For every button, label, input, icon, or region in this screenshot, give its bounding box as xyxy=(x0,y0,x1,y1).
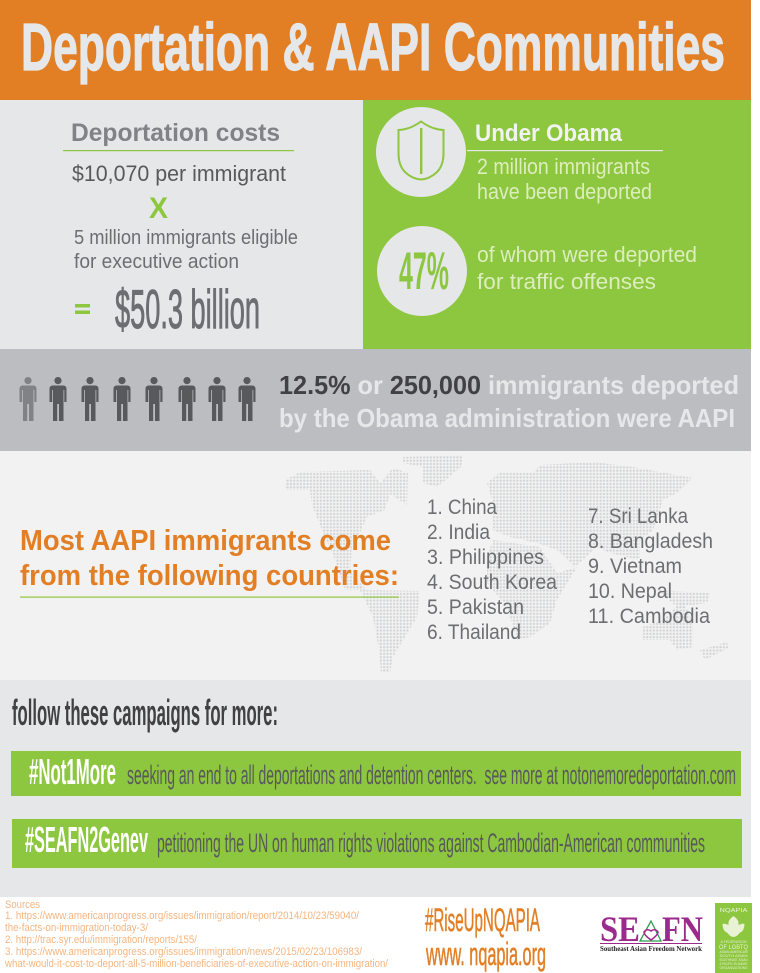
country list column 2: 10. Nepal xyxy=(588,580,672,603)
multiply sign: X xyxy=(149,192,168,225)
sources: 3. https://www.americanprogress.org/issues/immigration/news/2015/02/23/106983/ xyxy=(5,946,363,958)
sources: what-would-it-cost-to-deport-all-5-million-beneficiaries-of-executive-action-on-immigration/ xyxy=(4,958,389,970)
icon row: eight people xyxy=(20,377,256,421)
heading: deportation costs: Deportation costs xyxy=(71,119,280,147)
stat: 2 million deported: have been deported xyxy=(477,179,652,204)
panel: countries of origin xyxy=(0,451,751,680)
stat circle: 47%: 47% xyxy=(399,242,449,301)
logo: SEAFN: SE xyxy=(600,909,640,949)
sources: the-facts-on-immigration-today-3/ xyxy=(5,922,149,934)
country list column 1: 3. Philippines xyxy=(427,546,544,569)
country list column 1: 4. South Korea xyxy=(427,571,557,594)
sources: Sources xyxy=(5,899,40,911)
campaign: SEAFN2Genev: #SEAFN2Genev xyxy=(25,819,148,860)
stat: 2 million deported xyxy=(477,154,652,204)
hashtag and website xyxy=(425,902,546,972)
logo: NQAPIA: SOUTHEAST ASIAN xyxy=(720,958,748,962)
logo: NQAPIA: & PACIFIC ISLANDER xyxy=(720,962,748,966)
country list column 1: 5. Pakistan xyxy=(427,596,524,619)
country list column 1: 2. India xyxy=(427,521,490,544)
eligible immigrants: for executive action xyxy=(74,251,239,273)
heading: most AAPI immigrants: Most AAPI immigrants come xyxy=(20,525,391,557)
logo: NQAPIA: ORGANIZATIONS xyxy=(720,966,748,970)
campaign: SEAFN2Genev xyxy=(12,819,742,868)
country list column 2: 8. Bangladesh xyxy=(588,530,713,553)
logo: NQAPIA: A FEDERATION xyxy=(720,940,747,944)
statement text: 12.5% or 250,000 immigrants deported xyxy=(279,370,739,400)
statement text xyxy=(279,370,739,433)
statement text: by the Obama administration were AAPI xyxy=(279,403,735,433)
stat: traffic offenses xyxy=(477,242,697,294)
campaign: Not1More: #Not1More xyxy=(29,751,116,792)
country list column 2: 7. Sri Lanka xyxy=(588,505,688,528)
logo: NQAPIA: ASIAN AMERICAN xyxy=(720,950,748,954)
panel: deportation costs: $50.3 billion xyxy=(115,278,260,340)
country list column 1: 1. China xyxy=(427,496,497,519)
country list column 1 xyxy=(427,496,557,644)
panel: under Obama xyxy=(363,100,751,349)
country list column 2 xyxy=(588,505,713,628)
cost per immigrant: $10,070 per immigrant xyxy=(72,161,286,186)
heading: most AAPI immigrants: from the following countries: xyxy=(20,560,399,592)
stat circle: 47% xyxy=(377,226,467,316)
logo: SEAFN xyxy=(600,909,703,953)
eligible immigrants: 5 million immigrants eligible xyxy=(74,227,298,249)
sources: 1. https://www.americanprogress.org/issues/immigration/report/2014/10/23/59040/ xyxy=(5,910,360,922)
logo: SEAFN: Southeast Asian Freedom Network xyxy=(600,944,703,953)
text: #RiseUpNQAPIA xyxy=(425,902,540,938)
logo: SEAFN: FN xyxy=(662,909,703,949)
sources xyxy=(4,899,389,970)
country list column 2: 11. Cambodia xyxy=(588,605,710,628)
hashtag and website: www. nqapia.org xyxy=(425,936,546,972)
country list column 2: 9. Vietnam xyxy=(588,555,682,578)
stat: traffic offenses: of whom were deported xyxy=(477,242,697,267)
icon: shield xyxy=(376,107,466,197)
country list column 1: 6. Thailand xyxy=(427,621,521,644)
heading: under Obama: Under Obama xyxy=(475,120,623,147)
world map xyxy=(285,455,728,672)
sources: 2. http://trac.syr.edu/immigration/reports/155/ xyxy=(5,934,198,946)
stat: traffic offenses: for traffic offenses xyxy=(477,269,656,294)
logo: NQAPIA xyxy=(715,903,752,973)
logo: NQAPIA: SOUTH ASIAN xyxy=(720,954,748,958)
title banner xyxy=(0,0,751,100)
equals sign xyxy=(75,304,90,314)
panel: campaigns xyxy=(0,680,751,897)
logo: NQAPIA: OF LGBTQ xyxy=(719,945,748,951)
eligible immigrants xyxy=(74,227,298,273)
stat: 2 million deported: 2 million immigrants xyxy=(477,154,650,179)
panel: deportation costs xyxy=(0,100,363,349)
panel: AAPI share of deportations xyxy=(0,349,751,451)
campaign: Not1More xyxy=(11,751,741,796)
logo: NQAPIA: NQAPIA xyxy=(720,908,748,914)
heading: most AAPI immigrants xyxy=(20,525,399,592)
panel: campaigns: follow these campaigns for more: xyxy=(12,692,278,733)
